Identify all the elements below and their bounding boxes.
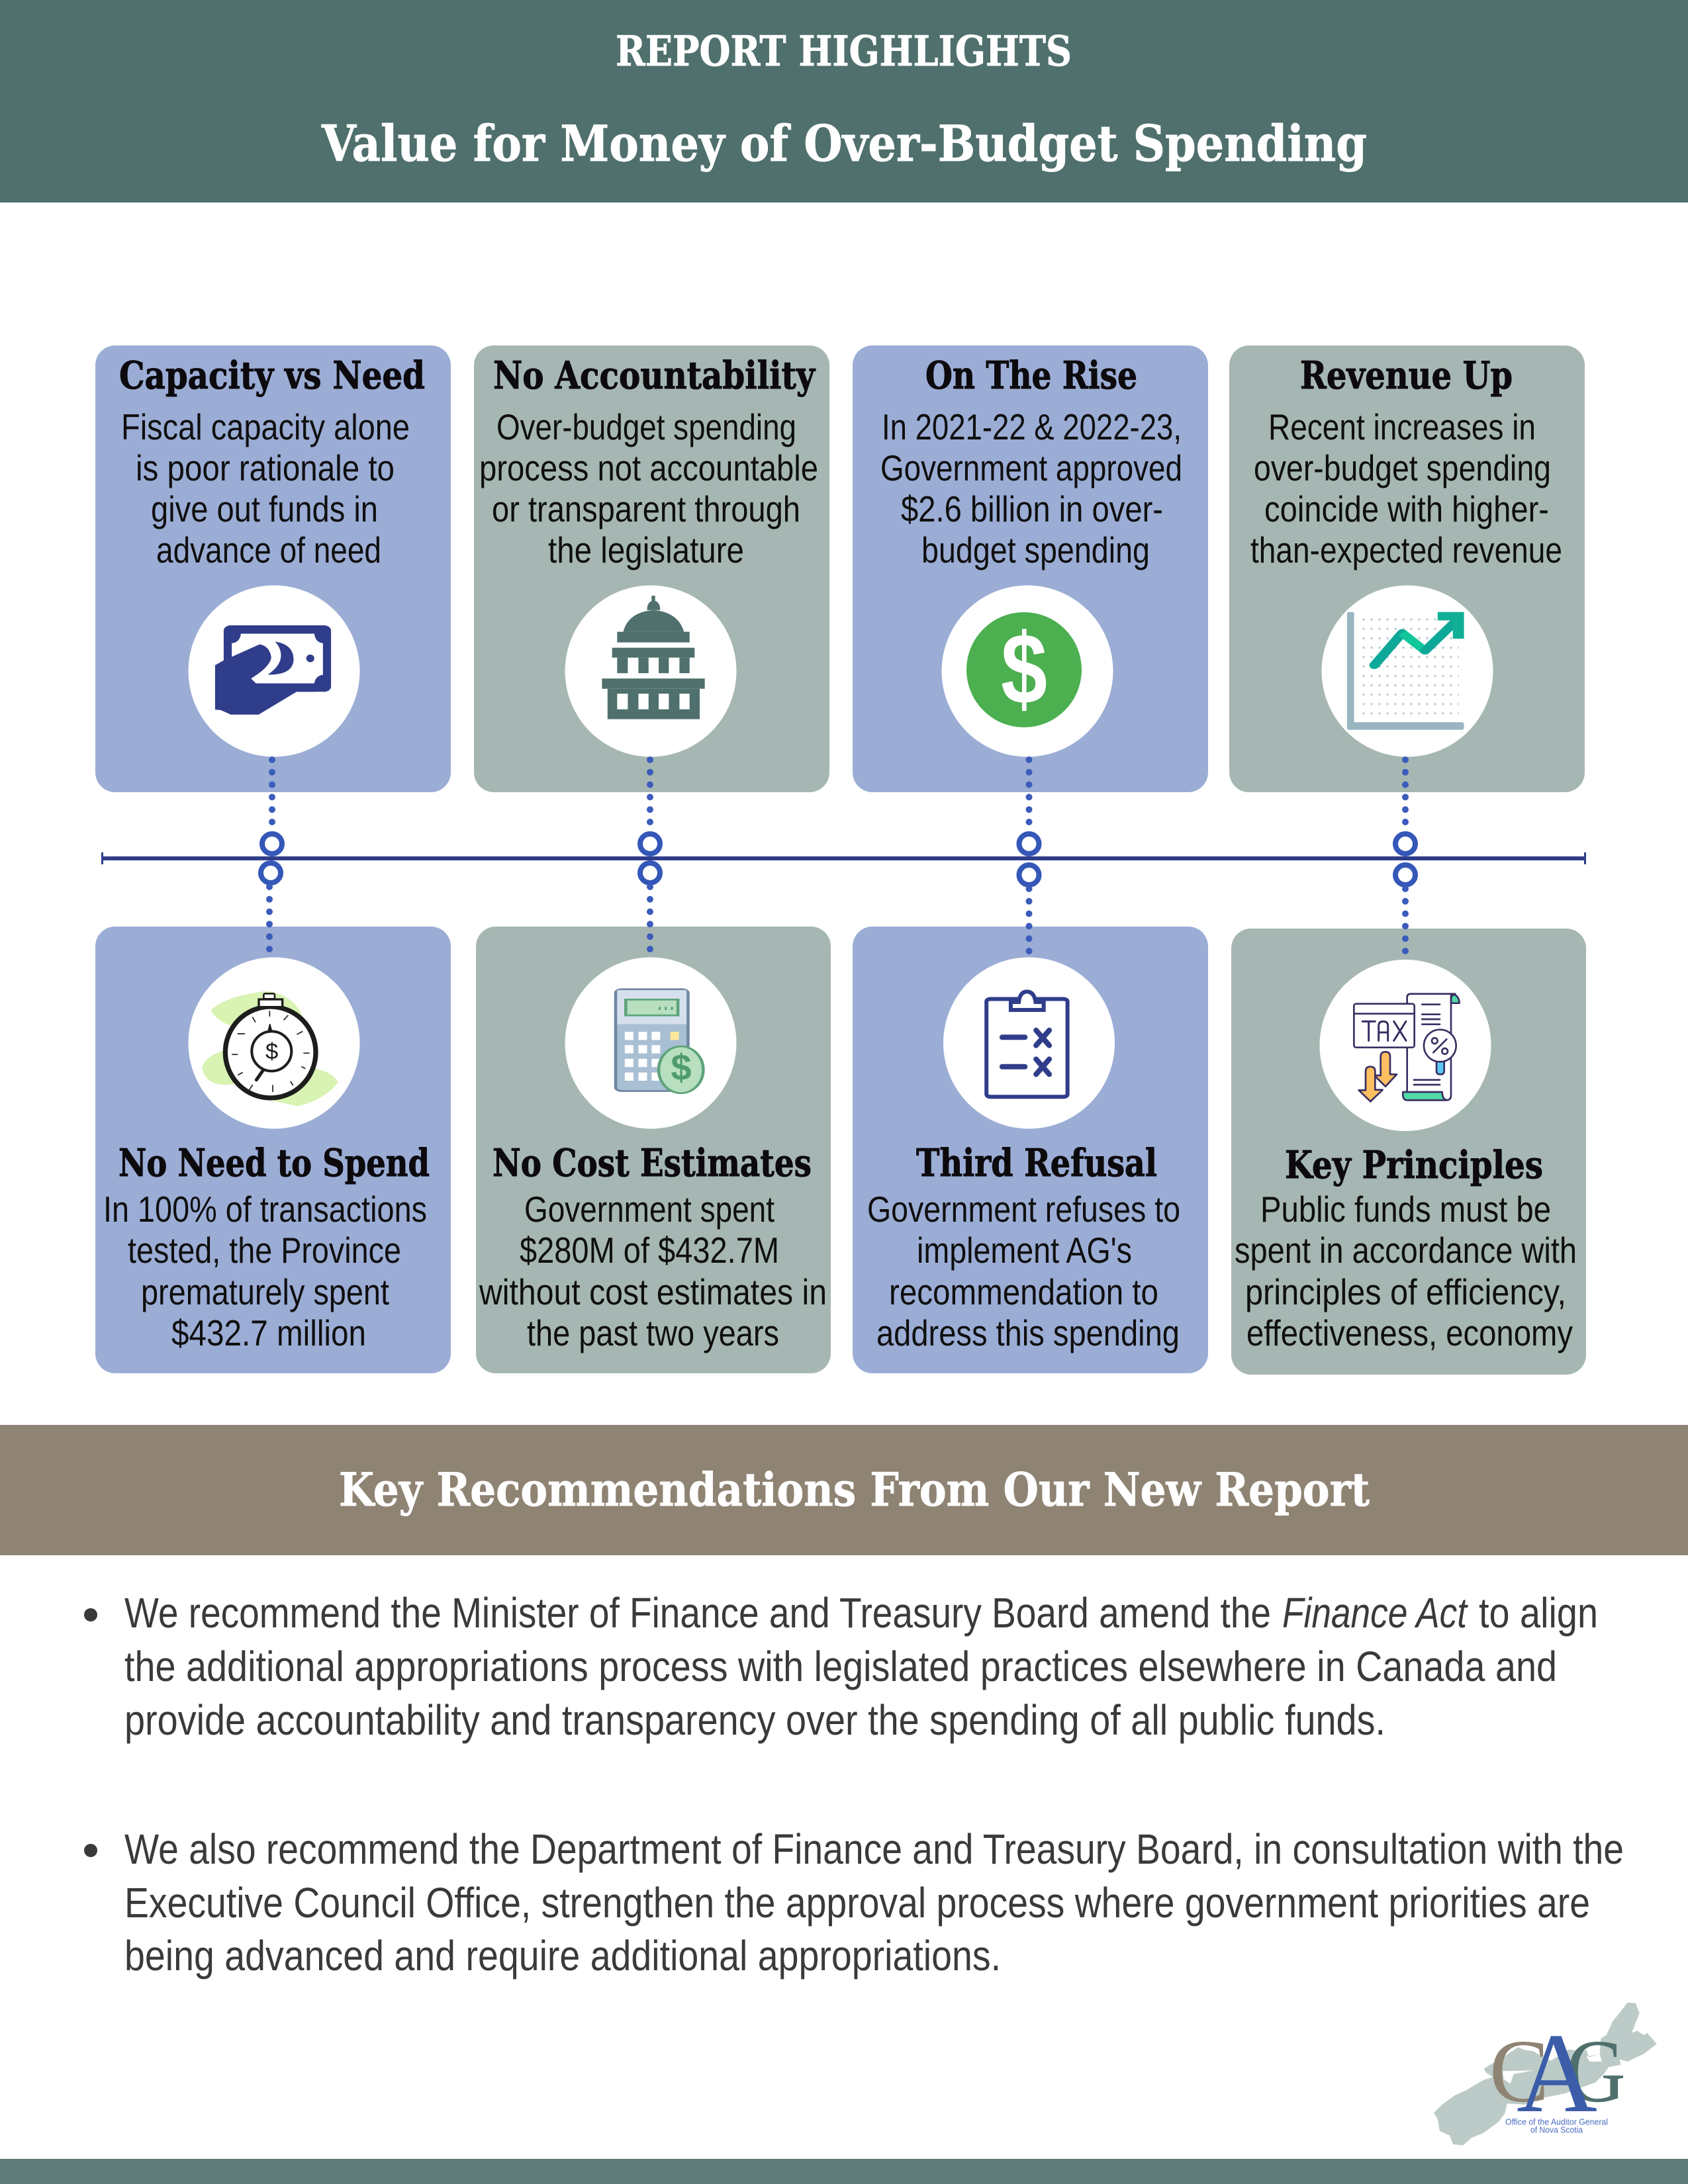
icon: hand with money xyxy=(188,585,360,757)
icon: stopwatch with dollar: $ xyxy=(265,1039,278,1064)
body text: the legislature xyxy=(548,529,744,570)
body text xyxy=(479,1189,827,1353)
recommendation 1: Finance Act xyxy=(1282,1589,1468,1637)
panel: No Accountability xyxy=(474,345,829,792)
panel: On The Rise xyxy=(853,345,1208,792)
logo caption xyxy=(1505,2118,1608,2135)
body text: $2.6 billion in over- xyxy=(901,488,1163,529)
icon: clipboard with crosses xyxy=(943,957,1115,1129)
logo letter G: G xyxy=(1566,2022,1626,2121)
panel: Key Principles xyxy=(1231,929,1586,1375)
body text: effectiveness, economy xyxy=(1246,1312,1573,1353)
recommendation 1: provide accountability and transparency over the spending of all public funds. xyxy=(124,1696,1385,1744)
logo letter C: C xyxy=(1489,2022,1549,2121)
body text: process not accountable xyxy=(479,447,818,488)
body text xyxy=(867,1189,1180,1353)
body text: prematurely spent xyxy=(141,1271,389,1312)
recommendation 2 xyxy=(84,1825,1624,1979)
icon: dollar coin: $ xyxy=(1001,613,1047,725)
body text: Over-budget spending xyxy=(496,406,796,447)
connector: dotted column 1 xyxy=(261,760,282,951)
logo letter A: A xyxy=(1517,2011,1597,2136)
body text: budget spending xyxy=(921,529,1150,570)
panel: Third Refusal xyxy=(853,927,1208,1373)
icon: stopwatch with dollar xyxy=(188,957,360,1129)
body text xyxy=(1235,1189,1577,1353)
connector: dotted column 3 xyxy=(1019,760,1039,953)
body text: than-expected revenue xyxy=(1250,529,1562,570)
icon: calculator with coin: $ xyxy=(671,1046,692,1088)
body text: advance of need xyxy=(156,529,381,570)
section banner: key recommendations: Key Recommendations From Our New Report xyxy=(339,1463,1370,1517)
panel: No Need to Spend xyxy=(95,927,451,1373)
body text: recommendation to xyxy=(889,1271,1158,1312)
recommendation 1 xyxy=(84,1589,1598,1744)
body text: coincide with higher- xyxy=(1264,488,1549,529)
body text xyxy=(103,1189,427,1353)
heading: Revenue Up xyxy=(1300,353,1513,398)
body text: principles of efficiency, xyxy=(1245,1271,1566,1312)
connector: timeline axis xyxy=(101,852,1586,864)
body text: In 100% of transactions xyxy=(103,1189,427,1230)
body text: implement AG's xyxy=(917,1230,1132,1271)
body text: give out funds in xyxy=(151,488,378,529)
title: Value for Money of Over-Budget Spending xyxy=(321,114,1367,173)
body text: is poor rationale to xyxy=(136,447,395,488)
body text: over-budget spending xyxy=(1254,447,1551,488)
icon: tax document xyxy=(1320,960,1491,1131)
panel: No Cost Estimates xyxy=(476,927,831,1373)
logo caption: Office of the Auditor General xyxy=(1505,2118,1608,2127)
heading: No Accountability xyxy=(493,353,816,398)
body text: the past two years xyxy=(527,1312,779,1353)
body text: without cost estimates in xyxy=(479,1271,827,1312)
body text: In 2021-22 & 2022-23, xyxy=(882,406,1182,447)
body text: $432.7 million xyxy=(171,1312,366,1353)
icon: dollar coin xyxy=(941,585,1113,757)
header label: REPORT HIGHLIGHTS xyxy=(616,26,1072,75)
recommendation 1: We recommend the Minister of Finance and Treasury Board amend the xyxy=(124,1589,1271,1637)
footer band xyxy=(0,2159,1688,2184)
heading: No Cost Estimates xyxy=(492,1141,812,1185)
body text: Government spent xyxy=(524,1189,774,1230)
panel: Revenue Up xyxy=(1229,345,1585,792)
body text: Government refuses to xyxy=(867,1189,1180,1230)
section banner: key recommendations xyxy=(0,1425,1688,1555)
body text xyxy=(880,406,1182,570)
heading: Capacity vs Need xyxy=(119,353,425,398)
body text xyxy=(479,406,818,570)
body text: Recent increases in xyxy=(1268,406,1536,447)
heading: Third Refusal xyxy=(916,1141,1157,1185)
icon: legislature building xyxy=(565,585,736,757)
heading: On The Rise xyxy=(925,353,1137,398)
heading: Key Principles xyxy=(1285,1143,1543,1187)
body text xyxy=(121,406,410,570)
body text: or transparent through xyxy=(492,488,800,529)
body text: Fiscal capacity alone xyxy=(121,406,410,447)
heading: No Need to Spend xyxy=(118,1141,430,1185)
body text: address this spending xyxy=(876,1312,1180,1353)
body text: tested, the Province xyxy=(128,1230,401,1271)
body text: spent in accordance with xyxy=(1235,1230,1577,1271)
icon: rising chart xyxy=(1321,585,1493,757)
recommendation 1: to align xyxy=(1479,1589,1598,1637)
body text: Public funds must be xyxy=(1260,1189,1551,1230)
logo: Office of the Auditor General xyxy=(1434,2003,1657,2146)
panel: Capacity vs Need xyxy=(95,345,451,792)
body text: $280M of $432.7M xyxy=(520,1230,779,1271)
icon: calculator with coin xyxy=(565,957,736,1129)
recommendation 2: being advanced and require additional appropriations. xyxy=(124,1932,1001,1979)
body text xyxy=(1250,406,1562,570)
connector: dotted column 2 xyxy=(640,760,660,951)
connector: dotted column 4 xyxy=(1395,760,1415,953)
header band xyxy=(0,0,1688,203)
logo caption: of Nova Scotia xyxy=(1530,2126,1583,2135)
body text: Government approved xyxy=(880,447,1182,488)
